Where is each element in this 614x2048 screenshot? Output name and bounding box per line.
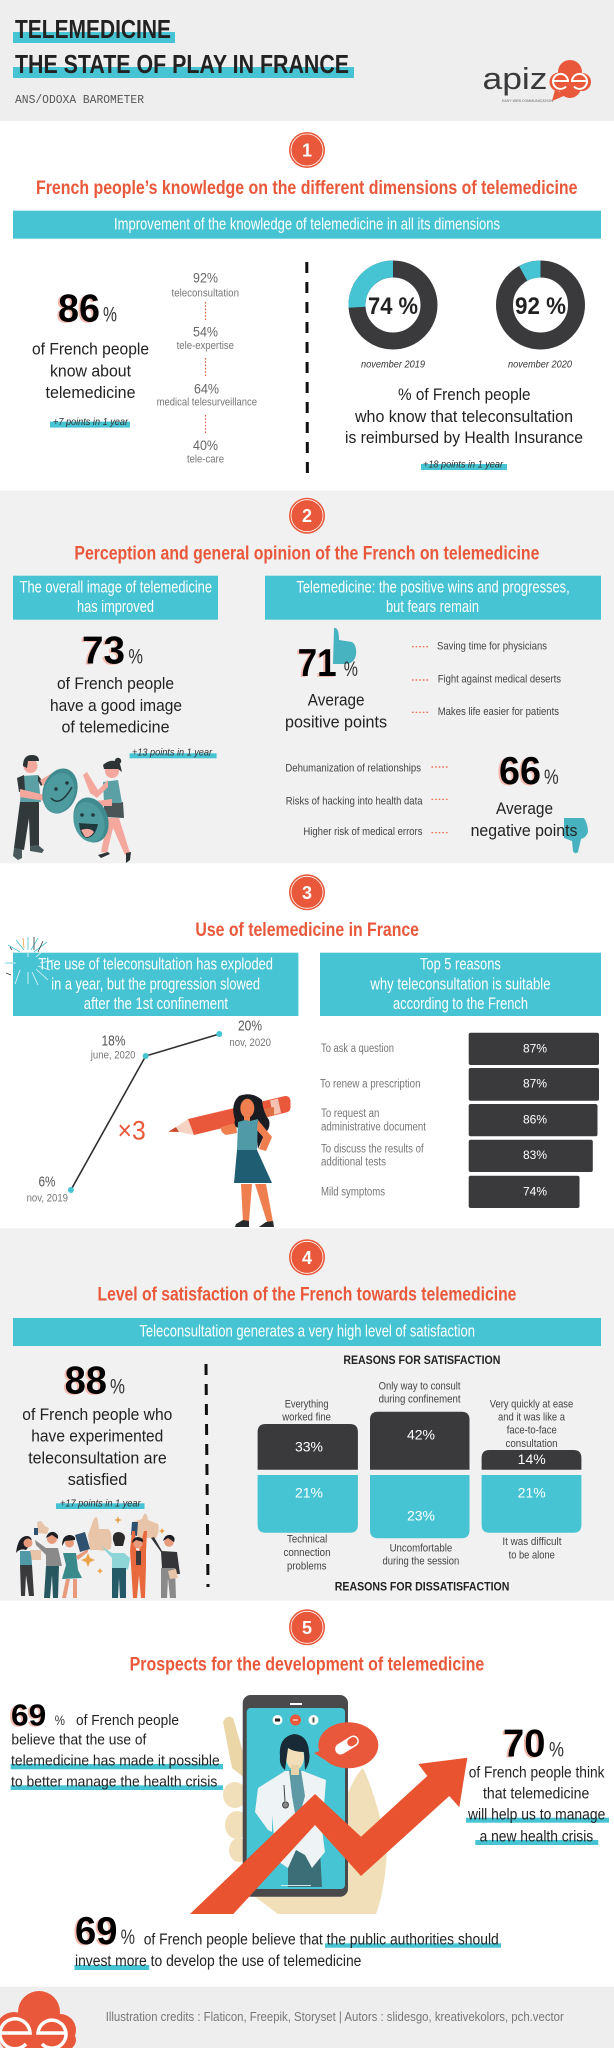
list: negative points: [285, 762, 448, 838]
banner 4: Teleconsultation generates a very high level of satisfaction: [139, 1323, 475, 1341]
text: 69 percent manage crisis: to better manage the health crisis: [11, 1774, 217, 1791]
column 2: 23%: [407, 1508, 435, 1524]
bar: mild symptoms: 74%: [523, 1184, 547, 1198]
list: positive points: Fight against medical deserts: [438, 673, 561, 685]
bar: additional tests: 83%: [523, 1148, 547, 1162]
logo: apizee: apiz: [482, 61, 548, 96]
section number 4: [289, 1239, 325, 1275]
banner 4: [13, 1318, 601, 1346]
column 3: 14%: [518, 1451, 546, 1467]
illustration: phone with doctor and rising arrow: [190, 1695, 467, 1914]
stat: 88 percent satisfied: [22, 1359, 172, 1509]
label: reasons for dissatisfaction: REASONS FOR DISSATISFACTION: [335, 1580, 509, 1594]
column 2: Uncomfortable: [390, 1542, 452, 1554]
stat: 73 percent good image: [50, 629, 217, 759]
bar: to renew a prescription: 87%: [523, 1077, 547, 1091]
stat: 66 percent negative: negative points: [471, 821, 578, 840]
diverging bar chart: satisfaction and dissatisfaction: [258, 1381, 581, 1573]
text: 69 percent manage crisis: %: [55, 1712, 65, 1728]
text: 70 percent new crisis: %: [549, 1739, 564, 1762]
panel: section 3 use: [5, 874, 601, 1227]
column 1: [258, 1398, 358, 1573]
column 3: 21%: [518, 1484, 546, 1500]
logo: apizee: [482, 60, 591, 103]
text: reimbursement: % of French people: [398, 385, 530, 404]
column 2: Only way to consult: [379, 1381, 460, 1393]
donut chart: november 2020: [504, 269, 576, 371]
stat: 71 percent positive: positive points: [285, 712, 387, 731]
stat: 71 percent positive: %: [344, 658, 358, 681]
column 1: Everything: [285, 1398, 328, 1410]
text: reimbursement: who know that teleconsultation: [354, 407, 573, 426]
heading 5: Prospects for the development of telemedicine: [130, 1654, 484, 1676]
bar: to ask a question: [321, 1033, 599, 1065]
banner: use exploded: The use of teleconsultation has exploded: [38, 955, 273, 973]
stat: 86 percent know telemedicine: 86: [58, 288, 100, 331]
icon: thumbs down: [564, 818, 588, 853]
text: reimbursement: is reimbursed by Health Insurance: [345, 428, 583, 447]
panel: section 4 satisfaction: [0, 1228, 614, 1601]
column 3: [482, 1398, 581, 1562]
column 1: connection: [284, 1547, 330, 1559]
hand: [223, 1717, 387, 1914]
list: negative points: Higher risk of medical errors: [303, 826, 423, 838]
doctor: [255, 1734, 326, 1887]
stat: 88 percent satisfied: +17 points in 1 year: [60, 1497, 141, 1509]
arrow: [190, 1758, 467, 1914]
text: 69 percent invest more: invest more to develop the use of telemedicine: [75, 1953, 361, 1970]
bar: to ask a question: To ask a question: [321, 1043, 394, 1055]
banner: top 5 reasons: according to the French: [393, 995, 528, 1013]
banner: positive wins: [265, 576, 601, 620]
icon: firework: [5, 937, 54, 985]
stat: 88 percent satisfied: teleconsultation are: [28, 1448, 167, 1467]
stat: 88 percent satisfied: have experimented: [31, 1427, 163, 1446]
column 1: 33%: [295, 1439, 323, 1455]
text: 69 percent invest more: [74, 1910, 501, 1970]
bar: additional tests: additional tests: [321, 1157, 386, 1169]
text: 70 percent new crisis: that telemedicine: [483, 1785, 589, 1802]
section number 5: 5: [302, 1618, 312, 1638]
text: 69 percent manage crisis: telemedicine has made it possible: [11, 1753, 220, 1770]
column 3: face-to-face: [507, 1425, 557, 1437]
line chart: teleconsultation use: [27, 1018, 271, 1204]
list: positive points: [412, 640, 561, 718]
donut chart: november 2020: 92 %: [515, 293, 566, 320]
stat: 66 percent negative: 66: [499, 750, 541, 793]
stat: 86 percent know telemedicine: of French people: [32, 339, 149, 358]
donut chart: november 2019: 74 %: [368, 293, 418, 320]
footer: [0, 1987, 614, 2048]
column 2: during the session: [382, 1555, 459, 1567]
illustration: crowd with thumbs up: [16, 1514, 180, 1598]
section number 2: 2: [302, 506, 312, 526]
bar: to renew a prescription: To renew a prescription: [320, 1078, 420, 1090]
bar: additional tests: [321, 1140, 593, 1172]
bar: to renew a prescription: [320, 1068, 599, 1101]
stat: 73 percent good image: %: [128, 645, 143, 668]
stat: 88 percent satisfied: of French people who: [22, 1405, 172, 1424]
list: telemedicine dimensions: 92%: [193, 271, 218, 286]
column 3: and it was like a: [498, 1412, 566, 1424]
text: 69 percent invest more: %: [121, 1926, 135, 1949]
stat: 86 percent know telemedicine: know about: [50, 362, 131, 381]
donut chart: november 2019: [357, 269, 429, 371]
column 2: 42%: [407, 1426, 435, 1442]
text: 69 percent invest more: 69: [75, 1910, 118, 1953]
stat: 71 percent positive: [285, 642, 387, 731]
banner: overall image: [13, 576, 218, 620]
column 3: Very quickly at ease: [490, 1398, 573, 1410]
banner 1: Improvement of the knowledge of telemedicine in all its dimensions: [114, 215, 500, 233]
stat: 88 percent satisfied: 88: [65, 1359, 107, 1402]
title: THE STATE OF PLAY IN FRANCE: [15, 49, 349, 79]
bar: administrative document: 86%: [523, 1112, 547, 1126]
bar: administrative document: [321, 1104, 598, 1136]
illustration: man and woman with smileys: [13, 755, 131, 863]
banner: top 5 reasons: why teleconsultation is suitable: [370, 975, 550, 993]
bar chart: top 5 reasons: [320, 1033, 599, 1208]
list: telemedicine dimensions: medical telesurveillance: [157, 397, 257, 409]
header panel: [0, 0, 614, 121]
column 1: 21%: [295, 1484, 323, 1500]
banner: top 5 reasons: [320, 953, 601, 1016]
section number 1: 1: [302, 140, 312, 160]
donut chart: november 2020: november 2020: [508, 359, 572, 371]
stat: 66 percent negative: Average: [496, 799, 553, 818]
stat: 88 percent satisfied: satisfied: [68, 1470, 127, 1489]
speech bubble with pill: [314, 1722, 378, 1768]
text: 70 percent new crisis: [466, 1723, 609, 1845]
panel: section 1 knowledge: [13, 132, 601, 477]
multiplier x3: ×3: [118, 1116, 146, 1146]
phone: [243, 1695, 348, 1897]
icon: thumbs up: [333, 628, 356, 664]
banner: top 5 reasons: Top 5 reasons: [420, 955, 501, 973]
line chart: teleconsultation use: nov, 2020: [229, 1037, 271, 1049]
heading 4: Level of satisfaction of the French towards telemedicine: [98, 1284, 517, 1306]
bar: mild symptoms: Mild symptoms: [321, 1187, 385, 1199]
stat: 73 percent good image: of telemedicine: [62, 718, 170, 737]
column 1: worked fine: [281, 1412, 331, 1424]
bar: mild symptoms: [321, 1176, 580, 1208]
title: [13, 14, 354, 79]
list: negative points: Risks of hacking into health data: [286, 795, 423, 807]
stat: 86 percent know telemedicine: telemedicine: [46, 383, 136, 402]
line chart: teleconsultation use: nov, 2019: [27, 1192, 68, 1204]
stat: 71 percent positive: Average: [308, 691, 364, 710]
line chart: teleconsultation use: 20%: [238, 1018, 262, 1035]
text: 70 percent new crisis: 70: [503, 1723, 545, 1766]
section number 3: 3: [302, 883, 312, 903]
bar: administrative document: To request an: [321, 1108, 379, 1120]
banner: overall image: The overall image of telemedicine: [20, 578, 212, 596]
column 1: problems: [287, 1561, 327, 1573]
stat: 73 percent good image: +13 points in 1 year: [132, 747, 212, 759]
text: 69 percent manage crisis: believe that the use of: [11, 1732, 147, 1749]
stat: 73 percent good image: 73: [82, 629, 125, 672]
panel: section 2 perception: [0, 491, 614, 863]
banner: use exploded: [13, 953, 298, 1016]
stat: 73 percent good image: have a good image: [50, 696, 182, 715]
bar: to ask a question: 87%: [523, 1041, 547, 1055]
illustration: woman with pencil: [168, 1094, 290, 1227]
stat: 71 percent positive: 71: [298, 642, 337, 685]
section number 4: 4: [302, 1248, 312, 1268]
section number 5: [289, 1609, 325, 1645]
text: 69 percent invest more: of French people believe that the public authorities should: [144, 1931, 499, 1948]
banner: overall image: has improved: [77, 598, 154, 616]
section number 3: [289, 874, 325, 910]
column 2: during confinement: [379, 1394, 460, 1406]
line chart: teleconsultation use: 6%: [38, 1174, 56, 1191]
section number 2: [289, 498, 325, 534]
column 3: It was difficult: [502, 1536, 562, 1548]
column 2: [370, 1381, 470, 1567]
text: 69 percent manage crisis: [11, 1697, 223, 1791]
stat: 73 percent good image: of French people: [57, 674, 174, 693]
logo mark: [0, 1991, 76, 2048]
column 3: to be alone: [509, 1550, 555, 1562]
stat: 86 percent know telemedicine: [32, 288, 149, 428]
bar: additional tests: To discuss the results of: [321, 1143, 424, 1155]
subtitle: ANS/ODOXA BAROMETER: [15, 94, 144, 107]
stat: 86 percent know telemedicine: %: [103, 304, 117, 327]
stat: 86 percent know telemedicine: +7 points in 1 year: [53, 416, 128, 428]
column 3: consultation: [506, 1438, 558, 1450]
section number 1: [289, 132, 325, 168]
text: reimbursement: +18 points in 1 year: [423, 459, 503, 471]
stat: 66 percent negative: %: [544, 766, 559, 789]
panel: section 5 prospects: [11, 1609, 609, 1970]
list: positive points: Saving time for physicians: [437, 640, 547, 652]
heading 3: Use of telemedicine in France: [195, 919, 419, 941]
list: telemedicine dimensions: tele-care: [187, 453, 224, 465]
line chart: teleconsultation use: 18%: [102, 1032, 126, 1049]
banner: use exploded: in a year, but the progression slowed: [51, 975, 260, 993]
banner: use exploded: after the 1st confinement: [84, 995, 228, 1013]
label: reasons for satisfaction: REASONS FOR SATISFACTION: [343, 1353, 500, 1367]
text: reimbursement: [345, 385, 583, 471]
list: telemedicine dimensions: 64%: [194, 381, 219, 396]
logo: apizee: EASY WEB COMMUNICATION: [502, 98, 553, 103]
text: 69 percent manage crisis: 69: [11, 1697, 46, 1732]
stat: 88 percent satisfied: %: [110, 1375, 125, 1398]
text: 69 percent manage crisis: of French people: [76, 1712, 179, 1729]
list: negative points: Dehumanization of relationships: [285, 762, 421, 774]
list: positive points: Makes life easier for patients: [438, 706, 559, 718]
credits: Illustration credits : Flaticon, Freepik, Storyset | Autors : slidesgo, kreativekolors, pch.vector: [106, 2009, 564, 2024]
text: 70 percent new crisis: a new health crisis: [480, 1828, 593, 1845]
list: telemedicine dimensions: 54%: [193, 325, 218, 340]
list: telemedicine dimensions: teleconsultation: [172, 288, 239, 300]
line chart: teleconsultation use: june, 2020: [90, 1050, 136, 1062]
column 1: Technical: [287, 1534, 327, 1546]
list: telemedicine dimensions: tele-expertise: [177, 340, 234, 352]
bar: administrative document: administrative document: [321, 1121, 427, 1133]
donut chart: november 2019: november 2019: [361, 359, 425, 371]
banner 1: [13, 211, 601, 239]
stat: 66 percent negative: [471, 750, 578, 840]
banner: positive wins: but fears remain: [386, 598, 479, 616]
list: telemedicine dimensions: 40%: [193, 438, 218, 453]
list: telemedicine dimensions: [157, 271, 257, 465]
title: TELEMEDICINE: [15, 14, 171, 44]
